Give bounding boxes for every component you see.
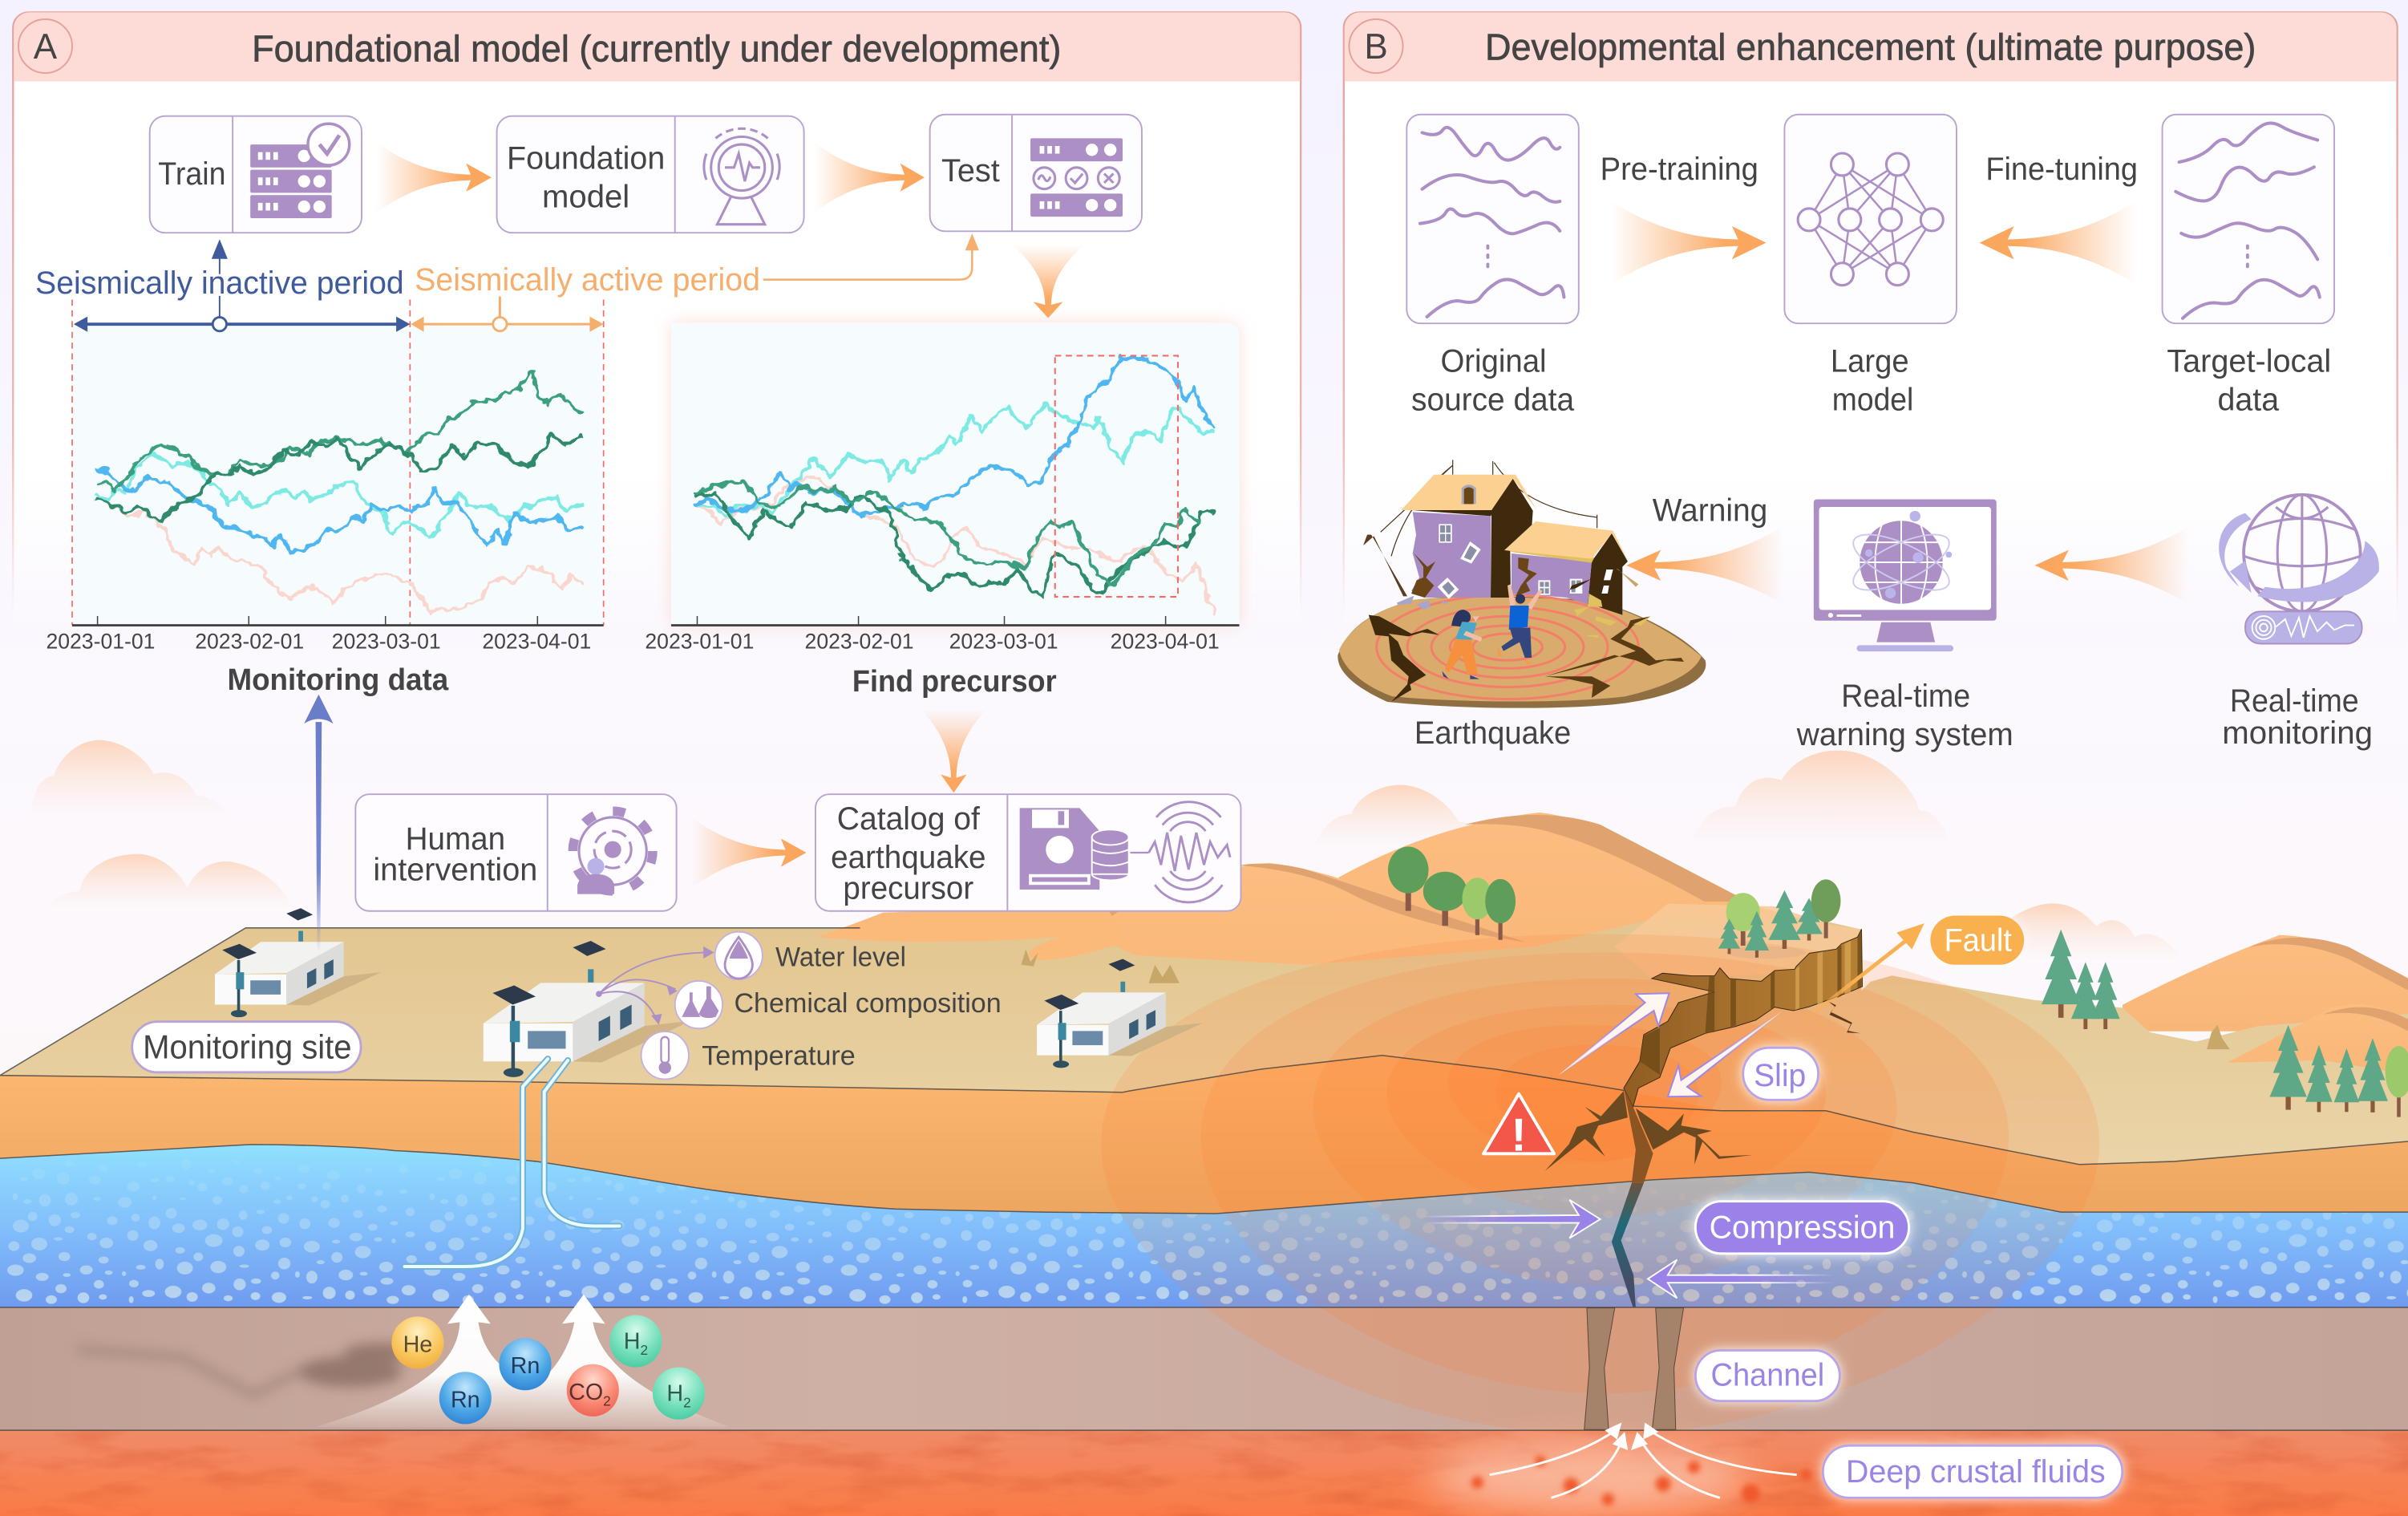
arrow: compression from left <box>1421 1200 1601 1238</box>
monitoring station middle <box>484 941 691 1077</box>
terrain: right foreground hill <box>2227 1004 2408 1075</box>
monitoring pipes <box>405 1059 619 1267</box>
arrow: train to foundation model <box>376 142 492 213</box>
icon: warning triangle: ! <box>1512 1110 1527 1161</box>
label: water level: Water level <box>775 942 906 973</box>
monitoring station left <box>215 908 381 1017</box>
arrow: test to find precursor <box>1011 245 1085 318</box>
label: pre-training with arrow <box>1601 151 1766 284</box>
icon: real-time monitoring globe: monitoring <box>2222 715 2373 751</box>
illustration: earthquake <box>1338 460 1706 751</box>
arrows: deep crustal fluids converging <box>1490 1423 1797 1498</box>
label: warning with arrow <box>1626 492 1783 604</box>
label: seismically active period with timeline <box>411 233 979 332</box>
box: Foundation model: model <box>542 179 629 215</box>
box: human intervention <box>355 794 677 911</box>
terrain: hill foot over ground <box>817 906 1129 960</box>
chart: find precursor: 2023-02-01 <box>805 629 914 653</box>
gas rising arrows <box>315 1295 730 1427</box>
gas bubbles: He <box>403 1332 432 1357</box>
icon: real-time warning system monitor: Real-time <box>1841 678 1970 714</box>
label: seismically active period with timeline: Seismically active period <box>415 261 760 298</box>
label: temperature: Temperature <box>702 1040 856 1071</box>
box: target-local data: Target-local <box>2167 343 2331 379</box>
terrain: ground surface <box>0 915 2408 1168</box>
label: fault <box>1930 915 2024 965</box>
box: Foundation model <box>497 116 804 233</box>
box: target-local data: data <box>2218 381 2280 417</box>
fault cliff and rupture cracks <box>1545 929 1862 1307</box>
panel: B developmental enhancement frame <box>1344 12 2398 645</box>
icon: real-time warning system monitor <box>1796 499 2013 752</box>
box: original source data <box>1406 115 1579 417</box>
terrain: top soil layer <box>0 1056 2408 1214</box>
arrow: compression from right <box>1648 1259 1835 1298</box>
chart: monitoring data: 2023-02-01 <box>195 629 304 653</box>
gas bubbles: 2 <box>603 1392 611 1409</box>
label: fault: Fault <box>1945 922 2012 959</box>
label: seismically inactive period with timeline: Seismically inactive period <box>35 265 404 301</box>
box: Train: Train <box>158 156 226 192</box>
label: fine-tuning with arrow <box>1980 151 2138 284</box>
label: deep crustal fluids: Deep crustal fluids <box>1846 1453 2106 1490</box>
label: fine-tuning with arrow: Fine-tuning <box>1985 151 2138 187</box>
chart: find precursor: 2023-01-01 <box>645 629 754 653</box>
arrow: slip up <box>1558 993 1669 1076</box>
label: warning with arrow: Warning <box>1653 492 1767 528</box>
box: catalog of earthquake precursor: Catalog of <box>837 801 981 837</box>
gas bubbles <box>391 1315 705 1424</box>
chart: monitoring data: 2023-04-01 <box>482 629 591 653</box>
box: human intervention: Human <box>406 821 505 857</box>
arrow: find precursor to catalog <box>921 710 986 792</box>
gas bubbles: 2 <box>640 1342 648 1358</box>
box: catalog of earthquake precursor: precursor <box>843 869 973 906</box>
label: deep crustal fluids <box>1823 1445 2123 1498</box>
heading: panel B: B <box>1364 27 1388 67</box>
icon: real-time warning system monitor: warning system <box>1796 716 2013 752</box>
arrow: foundation model to test <box>814 142 925 213</box>
heading: panel A: Foundational model (currently under development) <box>252 28 1061 70</box>
aquifer lightening over wave field <box>0 1145 2408 1307</box>
chart: monitoring data: Monitoring data <box>227 663 449 697</box>
label: compression: Compression <box>1710 1210 1895 1246</box>
gas bubbles: Rn <box>451 1387 480 1413</box>
box: human intervention: intervention <box>373 851 537 887</box>
arrow: fault pointer <box>1797 923 1924 1026</box>
chart: monitoring data: 2023-03-01 <box>332 629 441 653</box>
terrain: rock layer <box>0 1306 2408 1432</box>
label: monitoring site: Monitoring site <box>143 1028 352 1066</box>
box: catalog of earthquake precursor <box>815 794 1240 911</box>
label: chemical composition <box>675 981 1002 1028</box>
strata boundary lines <box>0 928 2408 1430</box>
terrain: aquifer with pebbles <box>0 1145 2408 1307</box>
chart: find precursor: Find precursor <box>852 664 1057 699</box>
seismic wave field concentric zones <box>1101 934 2099 1435</box>
label: pre-training with arrow: Pre-training <box>1601 151 1758 187</box>
box: large model network <box>1784 115 1957 417</box>
box: target-local data <box>2163 115 2334 417</box>
label: seismically inactive period with timeline <box>35 241 410 332</box>
heading: panel A: A <box>34 27 58 67</box>
label: chemical composition: Chemical composition <box>734 988 1002 1019</box>
channel walls <box>1584 1308 1684 1429</box>
icon: warning triangle <box>1483 1094 1554 1161</box>
gas bubbles: H <box>666 1381 683 1407</box>
box: Foundation model: Foundation <box>507 140 665 176</box>
box: Train <box>150 116 362 233</box>
arrow: slip down <box>1668 1012 1782 1096</box>
box: original source data: source data <box>1411 381 1575 417</box>
arrow: human intervention to catalog <box>691 817 806 888</box>
gas bubbles: 2 <box>683 1394 691 1410</box>
heading: panel B <box>1349 19 2256 73</box>
chart: find precursor: 2023-03-01 <box>949 629 1058 653</box>
arrow: monitoring to warning system <box>2035 527 2188 604</box>
clouds in sky <box>30 740 2181 960</box>
label: water level <box>715 932 906 979</box>
label: slip <box>1743 1048 1819 1100</box>
deep crustal fluid sources <box>1471 1456 1811 1506</box>
panel: A foundational model frame <box>13 12 1301 645</box>
label: channel: Channel <box>1711 1357 1824 1393</box>
box: large model network: Large <box>1831 343 1909 379</box>
label: slip: Slip <box>1754 1057 1806 1093</box>
gas bubbles: H <box>624 1329 640 1355</box>
heading: panel B: Developmental enhancement (ultimate purpose) <box>1485 26 2256 68</box>
chart: monitoring data <box>46 300 604 697</box>
terrain: back hills <box>816 813 2408 1032</box>
trees and grass <box>1022 847 2408 1117</box>
icon: real-time monitoring globe <box>2219 495 2379 751</box>
monitoring station right <box>1037 959 1203 1068</box>
arrow: monitoring data up from site <box>304 695 334 952</box>
label: temperature <box>641 1032 856 1079</box>
box: Test <box>930 115 1142 231</box>
box: catalog of earthquake precursor: earthquake <box>831 839 986 875</box>
icon: real-time monitoring globe: Real-time <box>2230 683 2359 719</box>
heading: panel A <box>18 19 1061 73</box>
gas bubbles: Rn <box>511 1353 540 1379</box>
illustration: earthquake: Earthquake <box>1414 715 1571 751</box>
chart: find precursor <box>645 322 1240 699</box>
gas bubbles: CO <box>569 1380 603 1405</box>
terrain: deep magma layer <box>0 1430 2408 1516</box>
box: original source data: Original <box>1440 343 1547 379</box>
label: compression <box>1695 1202 1909 1254</box>
box: Test: Test <box>941 152 1000 188</box>
chart: monitoring data: 2023-01-01 <box>46 629 155 653</box>
callout: sensor measurements <box>596 946 714 1024</box>
box: large model network: model <box>1832 381 1913 417</box>
label: channel <box>1695 1350 1839 1401</box>
chart: find precursor: 2023-04-01 <box>1111 629 1220 653</box>
terrain: fault platform ground <box>1614 904 1861 979</box>
